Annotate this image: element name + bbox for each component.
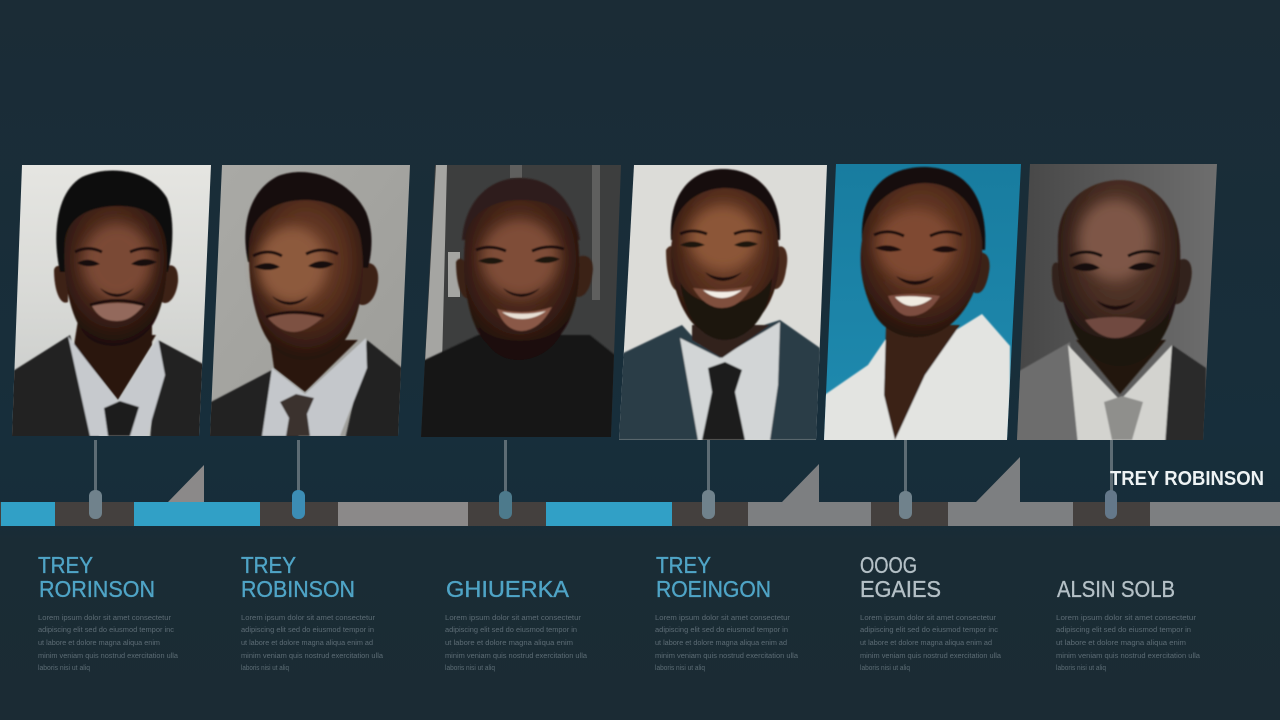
mouth <box>92 303 143 321</box>
heading: OOOG <box>860 552 917 578</box>
cheek and nose light <box>689 206 757 270</box>
beard <box>1070 310 1170 366</box>
heading: EGAIES <box>860 576 941 602</box>
column 5 text <box>860 552 1001 672</box>
eyes <box>1072 262 1156 271</box>
body text: adipiscing elit sed do eiusmod tempor inc <box>860 627 999 634</box>
panel: portrait 3 <box>415 160 625 440</box>
tie <box>1104 396 1143 440</box>
nose shadow <box>1096 300 1136 310</box>
neck <box>1076 340 1166 394</box>
head <box>1058 180 1180 363</box>
body text: Lorem ipsum dolor sit amet consectetur <box>1056 615 1197 622</box>
right jacket <box>1165 345 1206 445</box>
teeth <box>895 296 932 306</box>
face <box>64 206 167 346</box>
body text: Lorem ipsum dolor sit amet consectetur <box>655 615 791 622</box>
panel: portrait 2 <box>205 160 415 440</box>
body text: minim veniam quis nostrud exercitation ulla <box>860 653 1001 660</box>
shirt collar <box>262 338 367 436</box>
cheek and nose light <box>83 224 151 300</box>
pin 5 <box>899 440 912 519</box>
column 3 text <box>445 576 587 672</box>
hair <box>862 167 985 250</box>
tie <box>104 401 139 436</box>
body text: laboris nisi ut aliq <box>655 665 705 672</box>
jacket <box>5 335 205 440</box>
body text: Lorem ipsum dolor sit amet consectetur <box>241 615 376 622</box>
cheek and nose light <box>258 227 326 303</box>
heading: ALSIN SOLB <box>1057 576 1175 602</box>
body text: minim veniam quis nostrud exercitation ulla <box>445 653 587 660</box>
heading: RORINSON <box>39 576 155 602</box>
teeth <box>703 290 742 298</box>
suit <box>615 320 820 440</box>
nose shadow <box>896 276 934 285</box>
ear <box>359 263 378 305</box>
column 2 text <box>241 552 383 672</box>
mouth <box>268 314 322 332</box>
white shirt <box>820 314 1010 445</box>
face <box>861 183 982 337</box>
triangle marker 2 <box>782 464 819 502</box>
column 1 text <box>38 552 178 672</box>
beard <box>680 278 772 340</box>
ears <box>456 256 593 299</box>
ears <box>54 265 178 303</box>
cheek and nose light <box>1079 200 1151 280</box>
body text: minim veniam quis nostrud exercitation ulla <box>38 653 178 660</box>
cheek and nose light <box>877 210 953 280</box>
eyes <box>478 256 560 264</box>
pin 2 <box>292 440 305 519</box>
eyes <box>254 261 334 270</box>
body text: ut labore et dolore magna aliqua enim <box>1056 640 1186 647</box>
neck front <box>151 334 157 342</box>
lip line <box>266 312 324 317</box>
teeth <box>502 311 546 319</box>
column 4 text <box>655 552 798 672</box>
hair <box>56 170 172 272</box>
body text: adipiscing elit sed do eiusmod tempor in <box>655 627 788 634</box>
hair <box>462 178 580 240</box>
nose shadow <box>272 296 308 305</box>
body text: minim veniam quis nostrud exercitation ulla <box>1056 653 1200 660</box>
heading: TREY <box>656 552 711 578</box>
hair <box>245 172 372 268</box>
body text: minim veniam quis nostrud exercitation ulla <box>241 653 383 660</box>
eyes <box>680 241 758 248</box>
heading: GHIUERKA <box>446 576 570 602</box>
nose shadow <box>100 288 134 297</box>
body text: ut labore et dolore magna aliqua enim ad <box>241 640 373 647</box>
shirt <box>680 322 780 440</box>
body text: Lorem ipsum dolor sit amet consectetur <box>445 615 582 622</box>
neck <box>270 340 358 392</box>
panel: portrait 5 <box>820 160 1025 445</box>
left jacket <box>1012 342 1085 445</box>
body text: minim veniam quis nostrud exercitation ulla <box>655 653 798 660</box>
ears <box>666 246 787 291</box>
tie <box>702 362 745 440</box>
eyebrows <box>680 231 762 234</box>
neck <box>692 325 770 358</box>
body text: Lorem ipsum dolor sit amet consectetur <box>860 615 997 622</box>
nose shadow <box>503 288 540 297</box>
background vertical bars <box>510 165 600 300</box>
beard <box>478 322 566 360</box>
triangle marker 1 <box>168 465 204 502</box>
shirt <box>1068 345 1172 445</box>
tie <box>280 394 314 436</box>
ears <box>1052 259 1192 304</box>
triangle marker 3 <box>976 457 1020 502</box>
background window strips <box>425 165 460 365</box>
body text: adipiscing elit sed do eiusmod tempor in <box>241 627 374 634</box>
pin 1 <box>89 440 102 519</box>
nose shadow <box>705 272 742 281</box>
timeline label: TREY ROBINSON <box>1110 468 1264 490</box>
face <box>249 200 363 360</box>
column 6 text <box>1056 576 1200 672</box>
eyebrows <box>1070 251 1160 256</box>
heading: ROBINSON <box>241 576 355 602</box>
mouth <box>1085 317 1146 338</box>
panel: portrait 4 <box>615 160 830 445</box>
panel: portrait 1 <box>12 165 211 436</box>
pin 4 <box>702 440 715 519</box>
body text: laboris nisi ut aliq <box>445 665 495 672</box>
ear <box>973 252 990 293</box>
lip line <box>90 300 145 305</box>
eyebrows <box>874 232 962 236</box>
open collar skin <box>884 325 960 440</box>
body text: ut labore et dolore magna aliqua enim <box>445 640 573 647</box>
black shirt <box>418 335 615 440</box>
hair <box>671 169 780 240</box>
body text: Lorem ipsum dolor sit amet consectetur <box>38 615 172 622</box>
body text: laboris nisi ut aliq <box>241 665 289 672</box>
eyes <box>875 245 958 252</box>
body text: laboris nisi ut aliq <box>860 665 910 672</box>
heading: TREY <box>38 552 93 578</box>
face <box>464 200 579 355</box>
shirt collar <box>68 336 165 436</box>
body text: ut labore et dolore magna aliqua enim <box>38 640 160 647</box>
pin 3 <box>499 440 512 519</box>
heading: ROEINGON <box>656 576 771 602</box>
body text: adipiscing elit sed do eiusmod tempor in <box>1056 627 1191 634</box>
body text: ut labore et dolore magna aliqua enim ad <box>655 640 787 647</box>
body text: adipiscing elit sed do eiusmod tempor inc <box>38 627 175 634</box>
face <box>671 188 779 336</box>
jacket <box>205 340 402 440</box>
eyes <box>77 259 157 266</box>
mouth <box>497 307 552 331</box>
body text: ut labore et dolore magna aliqua enim ad <box>860 640 992 647</box>
neck <box>74 320 152 400</box>
body text: adipiscing elit sed do eiusmod tempor in <box>445 627 577 634</box>
body text: laboris nisi ut aliq <box>38 665 90 672</box>
heading: TREY <box>241 552 296 578</box>
eyebrows <box>476 247 564 251</box>
eyebrows <box>253 250 338 256</box>
body text: laboris nisi ut aliq <box>1056 665 1106 672</box>
timeline bar <box>0 502 1280 526</box>
eyebrows <box>75 248 159 252</box>
mouth <box>693 286 752 308</box>
cheek and nose light <box>482 220 558 296</box>
mouth <box>888 294 940 316</box>
pin 6 <box>1105 440 1117 519</box>
panel: portrait 6 <box>1012 160 1222 445</box>
